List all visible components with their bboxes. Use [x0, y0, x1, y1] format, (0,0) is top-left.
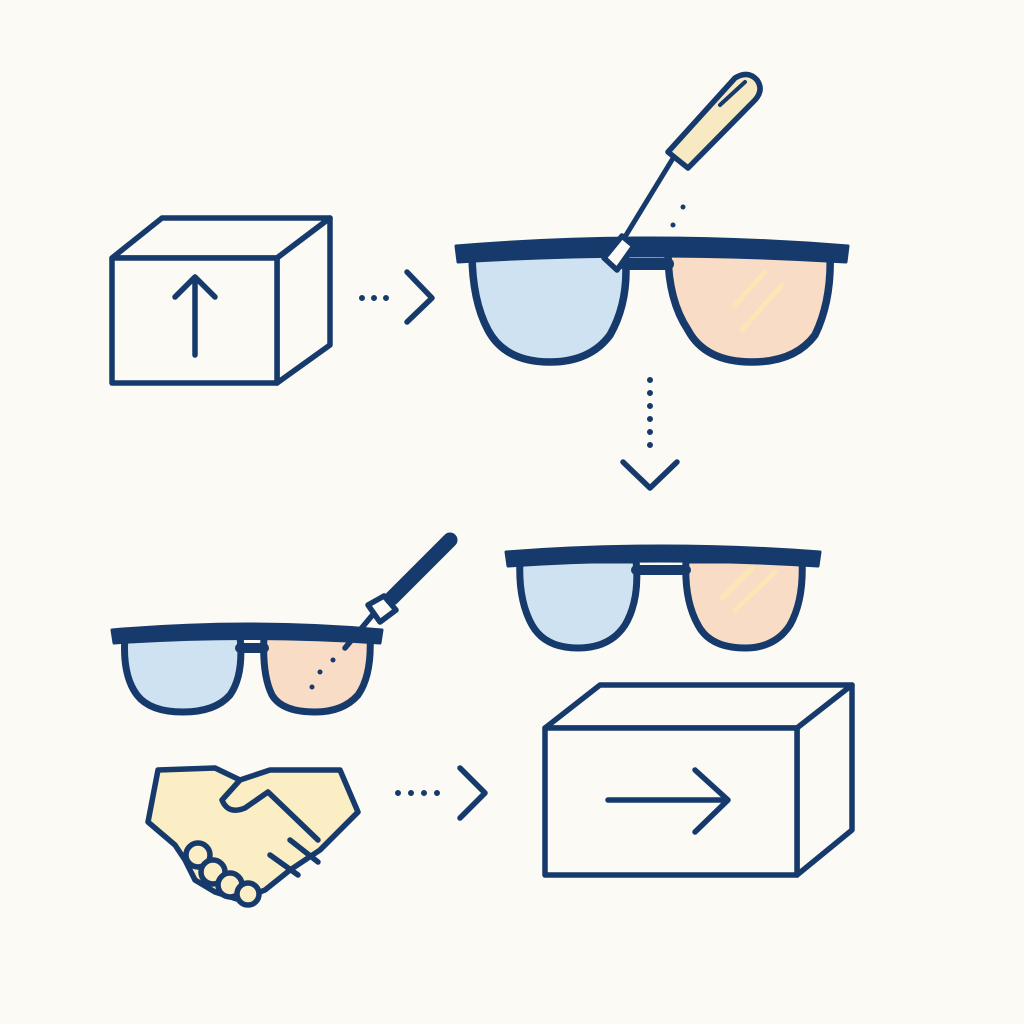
icon: box with right arrow: [545, 685, 852, 875]
icon: glasses middle: [506, 546, 820, 648]
arrow: dotted down: [623, 380, 677, 488]
icon: glasses with screwdriver bottom-left: [112, 540, 450, 712]
icon: screwdriver top: [604, 74, 760, 270]
icon: box with up arrow: [112, 218, 330, 383]
arrow: dotted right top: [362, 272, 432, 322]
icon: glasses with screwdriver top: [456, 74, 848, 362]
icon: handshake: [148, 768, 358, 905]
arrow: dotted right bottom: [398, 768, 485, 818]
icon: screwdriver bottom: [310, 540, 450, 690]
